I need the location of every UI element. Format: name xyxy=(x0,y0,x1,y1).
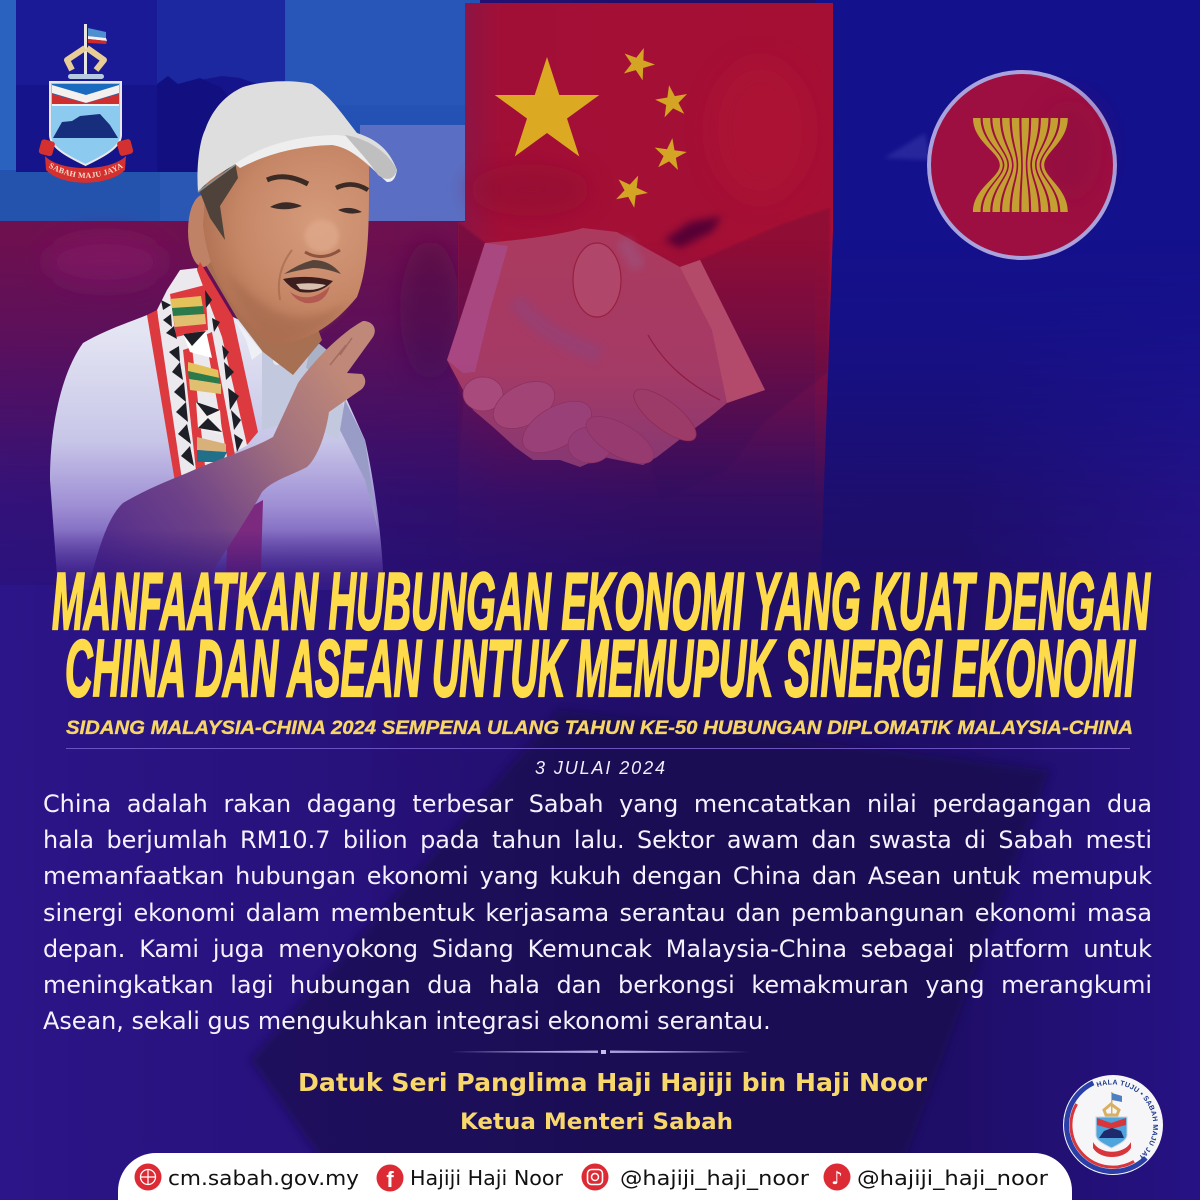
Instagram: @hajiji_haji_noor xyxy=(620,1166,810,1190)
name: Datuk Seri Panglima Haji Hajiji bin Haji Noor xyxy=(298,1068,928,1097)
portrait: Hajiji waving xyxy=(50,81,397,600)
ear xyxy=(188,195,211,267)
icon: large gold star xyxy=(495,57,599,156)
panel: ASEAN flag field xyxy=(815,0,1200,600)
motto ribbon: SABAH MAJU JAYA xyxy=(48,163,124,178)
body paragraph: sinergi ekonomi dalam membentuk kerjasama serantau dan pembangunan ekonomi masa xyxy=(43,899,1152,927)
body paragraph: hala berjumlah RM10.7 bilion pada tahun lalu. Sektor awam dan swasta di Sabah mesti xyxy=(43,826,1152,854)
eyes xyxy=(270,202,302,209)
panel: handshake hands xyxy=(447,228,765,473)
face xyxy=(203,145,369,340)
mini crest xyxy=(1093,1092,1131,1157)
body paragraph: depan. Kami juga menyokong Sidang Kemuncak Malaysia-China sebagai platform untuk xyxy=(43,935,1152,963)
cap xyxy=(197,81,397,192)
arm and raised hand xyxy=(88,321,375,590)
panel: Sabah flag, upper left xyxy=(0,0,480,222)
body paragraph xyxy=(43,790,1152,1035)
mouth xyxy=(283,277,333,293)
icon: small star 4 xyxy=(610,169,653,210)
clasped arms xyxy=(67,48,104,70)
body paragraph: China adalah rakan dagang terbesar Sabah yang mencatatkan nilai perdagangan dua xyxy=(43,790,1152,818)
date: 3 JULAI 2024 xyxy=(535,758,665,778)
panel: maroon band, left xyxy=(0,221,470,591)
left fingers xyxy=(463,377,503,411)
hair xyxy=(200,162,238,240)
icon: ASEAN emblem xyxy=(929,72,1115,258)
right cuff xyxy=(680,260,765,403)
TikTok: ♪ xyxy=(831,1168,843,1189)
right fingers xyxy=(626,381,704,449)
body paragraph: Asean, sekali gus mengukuhkan integrasi ekonomi serantau. xyxy=(43,1007,771,1035)
facet shapes in the lower background xyxy=(250,710,1050,1200)
flag pole and flag xyxy=(84,24,107,74)
Facebook: Hajiji Haji Noor xyxy=(410,1166,564,1190)
eyebrows xyxy=(267,177,308,184)
neck xyxy=(206,262,322,375)
Instagram xyxy=(582,1164,810,1190)
icon: small star 2 xyxy=(653,82,690,118)
subtitle: SIDANG MALAYSIA-CHINA 2024 SEMPENA ULANG TAHUN KE-50 HUBUNGAN DIPLOMATIK MALAYSIA-CHINA xyxy=(66,718,1133,739)
moustache xyxy=(284,260,341,274)
title xyxy=(52,557,1151,714)
icon: small star 3 xyxy=(652,136,688,171)
wreath xyxy=(68,74,104,79)
divider ornament xyxy=(450,1050,750,1054)
website xyxy=(134,1164,359,1190)
icon: Sabah coat of arms xyxy=(38,24,134,183)
Facebook: f xyxy=(386,1167,394,1192)
body paragraph: memanfaatkan hubungan ekonomi yang kukuh dengan China dan Asean untuk memupuk xyxy=(43,862,1152,890)
footer bar xyxy=(118,1153,1072,1200)
left cuff xyxy=(447,243,508,373)
TikTok: @hajiji_haji_noor xyxy=(857,1166,1049,1190)
icon: Hala Tuju badge: HALA TUJU • SABAH MAJU JAYA xyxy=(1096,1080,1158,1160)
thumb xyxy=(573,243,621,317)
motto ribbon xyxy=(38,139,134,183)
panel: China flag xyxy=(458,3,833,600)
website: cm.sabah.gov.my xyxy=(168,1166,359,1190)
scarf xyxy=(147,262,258,482)
position: Ketua Menteri Sabah xyxy=(460,1110,733,1135)
nose xyxy=(305,220,340,257)
fade from images into purple xyxy=(0,271,1200,600)
shield xyxy=(50,82,121,165)
Facebook xyxy=(376,1164,564,1192)
TikTok xyxy=(824,1164,1049,1190)
cheek crease xyxy=(279,250,292,300)
icon: small star 1 xyxy=(618,42,659,83)
panel: handshake sleeves xyxy=(447,208,830,590)
scarf tail below the arm xyxy=(225,500,263,600)
shirt xyxy=(50,315,384,590)
body paragraph: meningkatkan lagi hubungan dua hala dan berkongsi kemakmuran yang merangkumi xyxy=(43,971,1152,999)
